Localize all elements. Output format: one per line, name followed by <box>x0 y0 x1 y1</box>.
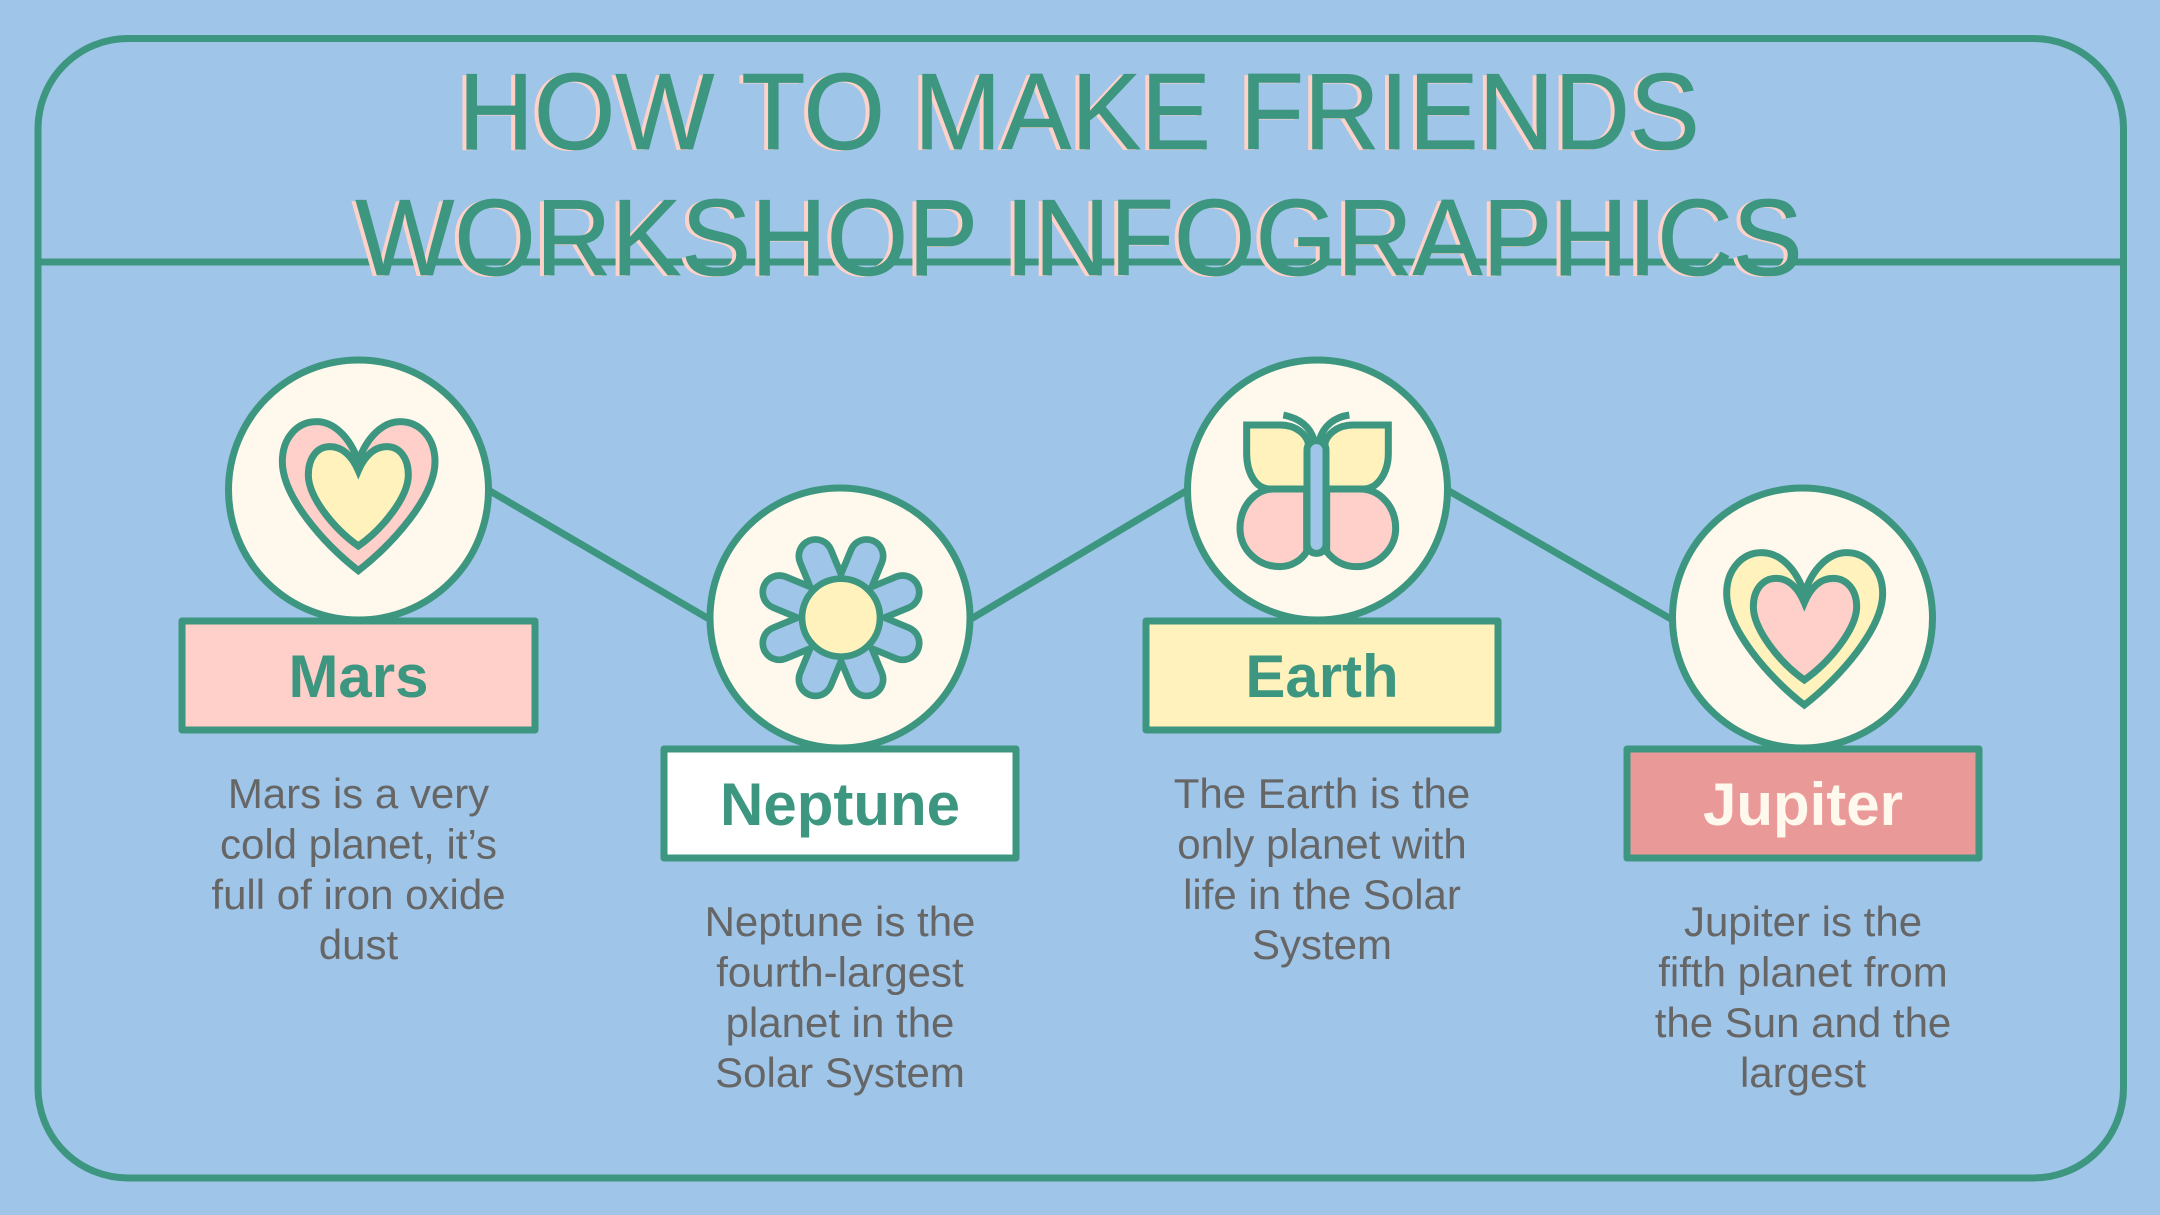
Earth label: Earth <box>1245 643 1399 710</box>
Mars circle <box>228 360 488 620</box>
Mars label: Mars <box>288 643 429 710</box>
Earth description: The Earth is the <box>1174 770 1470 817</box>
panel: Neptune <box>664 488 1016 1096</box>
Earth description: only planet with <box>1177 820 1467 867</box>
Earth circle <box>1188 360 1448 620</box>
panel: Jupiter <box>1627 488 1979 1096</box>
Jupiter circle <box>1672 488 1932 748</box>
Mars description: Mars is a very <box>228 770 489 817</box>
title: HOW TO MAKE FRIENDS <box>458 51 1700 173</box>
header divider <box>38 258 2123 266</box>
Earth label box <box>1146 621 1498 730</box>
title <box>352 51 1803 299</box>
Neptune description: Solar System <box>715 1049 965 1096</box>
Mars description: full of iron oxide <box>211 871 506 918</box>
icon: Jupiter double heart <box>1727 553 1883 705</box>
title: WORKSHOP INFOGRAPHICS <box>355 177 1803 299</box>
Neptune description: planet in the <box>726 999 954 1046</box>
Earth description: life in the Solar <box>1183 871 1461 918</box>
Jupiter description: the Sun and the <box>1655 999 1951 1046</box>
panel: Earth <box>1146 360 1498 968</box>
Jupiter description: largest <box>1740 1049 1866 1096</box>
connector lines <box>490 491 1671 619</box>
Neptune description: fourth-largest <box>716 948 964 995</box>
icon: Neptune flower <box>779 556 903 679</box>
icon: Mars double heart <box>282 422 435 571</box>
panel: Mars <box>182 360 535 968</box>
Jupiter label box <box>1627 749 1979 858</box>
Mars description: cold planet, it’s <box>220 820 497 867</box>
Mars description: dust <box>319 921 399 968</box>
Neptune circle <box>710 488 970 748</box>
Jupiter label: Jupiter <box>1703 771 1903 838</box>
Mars label box <box>182 621 535 730</box>
Neptune label: Neptune <box>720 771 960 838</box>
Neptune description: Neptune is the <box>705 898 975 945</box>
Jupiter description: Jupiter is the <box>1684 898 1922 945</box>
icon: Earth butterfly <box>1240 415 1396 567</box>
Neptune label box <box>664 749 1016 858</box>
Earth description: System <box>1252 921 1392 968</box>
Jupiter description: fifth planet from <box>1658 948 1948 995</box>
